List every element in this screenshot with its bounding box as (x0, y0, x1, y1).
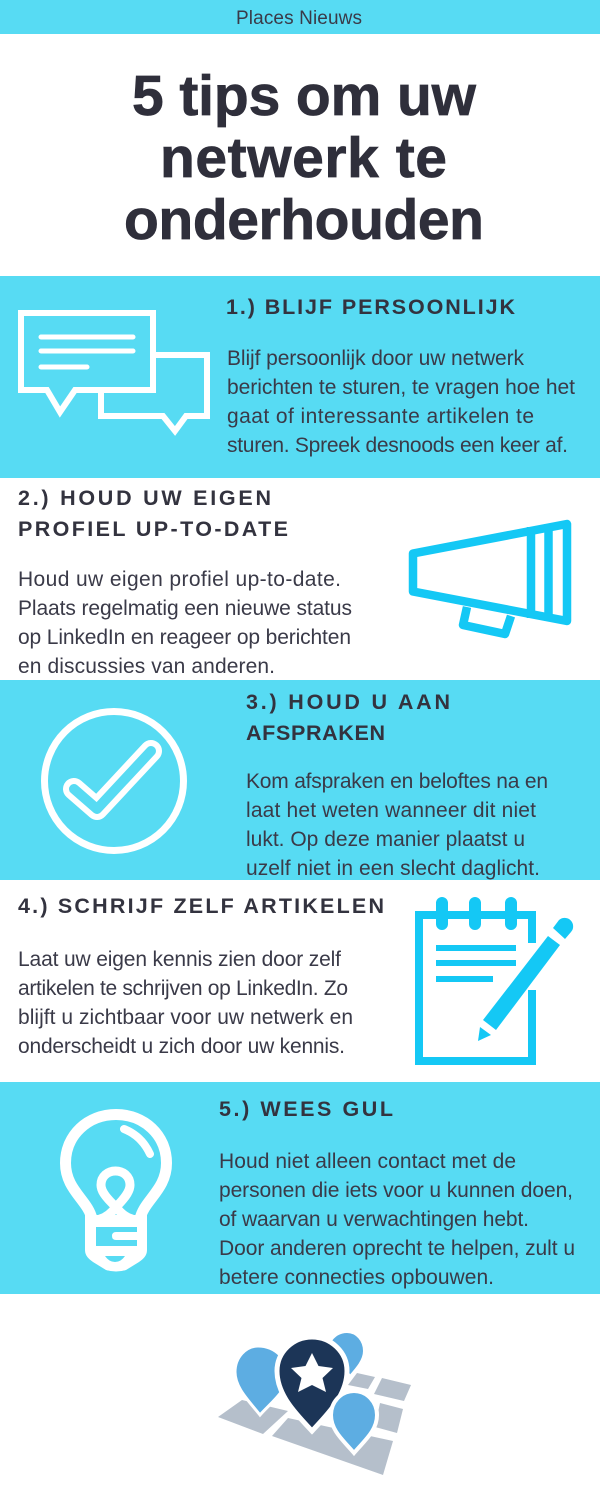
heading: tip 1: 1.) BLIJF PERSOONLIJK (226, 295, 515, 319)
text: tip 5: betere connecties opbouwen. (219, 1266, 494, 1289)
heading: tip 5: 5.) WEES GUL (219, 1097, 393, 1121)
text: tip 5 (219, 1150, 575, 1289)
text: tip 1: sturen. Spreek desnoods een keer af. (227, 434, 568, 457)
text: tip 2: op LinkedIn en reageer op berichten (18, 626, 351, 649)
text: tip 4: Laat uw eigen kennis zien door zelf (18, 948, 341, 971)
heading: tip 2: PROFIEL UP-TO-DATE (18, 517, 288, 541)
text: tip 3: lukt. Op deze manier plaatst u (246, 828, 525, 851)
text: tip 5: personen die iets voor u kunnen doen, (219, 1179, 573, 1202)
text: tip 5: Door anderen oprecht te helpen, zult u (219, 1237, 575, 1260)
text: tip 5: of waarvan u verwachtingen hebt. (219, 1208, 529, 1231)
text: tip 3: laat het weten wanneer dit niet (246, 799, 536, 822)
text: tip 1: berichten te sturen, te vragen hoe het (227, 376, 575, 399)
heading: tip 3 (246, 690, 450, 745)
panel: tip 5 (0, 1082, 600, 1294)
logo: map with pins (218, 1332, 411, 1475)
header band: Places Nieuws (236, 8, 362, 29)
text: tip 1 (227, 347, 575, 457)
heading: tip 2 (18, 486, 288, 541)
text: tip 1: Blijf persoonlijk door uw netwerk (227, 347, 524, 370)
text: tip 2: en discussies van anderen. (18, 655, 275, 678)
title: 5 tips om uw (132, 64, 477, 128)
heading: tip 4: 4.) SCHRIJF ZELF ARTIKELEN (18, 894, 384, 918)
panel: tip 1 (0, 276, 600, 478)
text: tip 4 (18, 948, 353, 1058)
icon: megaphone (413, 524, 567, 634)
map tiles (218, 1373, 411, 1475)
text: tip 3: Kom afspraken en beloftes na en (246, 770, 548, 793)
text: tip 2: Plaats regelmatig een nieuwe status (18, 597, 352, 620)
heading: tip 3: 3.) HOUD U AAN (246, 690, 450, 714)
panel: tip 4 (18, 894, 573, 1061)
text: tip 2: Houd uw eigen profiel up-to-date. (18, 568, 341, 591)
title: netwerk te (160, 126, 447, 190)
panel: tip 3 (0, 680, 600, 880)
text: tip 5: Houd niet alleen contact met de (219, 1150, 516, 1173)
icon: chat bubbles (21, 313, 207, 431)
dark pin with star (277, 1337, 347, 1431)
title: onderhouden (124, 188, 484, 252)
text: tip 4: artikelen te schrijven op LinkedIn. Zo (18, 977, 348, 1000)
text: tip 4: onderscheidt u zich door uw kennis. (18, 1035, 345, 1058)
light pin front (331, 1391, 377, 1453)
text: tip 2 (18, 568, 352, 678)
text: tip 3 (246, 770, 548, 880)
light pin left (235, 1346, 284, 1415)
header band (0, 0, 600, 34)
text: tip 3: uzelf niet in een slecht daglicht. (246, 857, 540, 880)
text: tip 1: gaat of interessante artikelen te (227, 405, 534, 428)
icon: notepad and pencil (419, 903, 573, 1061)
title (124, 64, 484, 252)
panel: tip 2 (18, 486, 567, 678)
light pin back (330, 1332, 364, 1376)
icon: check mark in circle (44, 712, 184, 850)
text: tip 4: blijft u zichtbaar voor uw netwerk en (18, 1006, 353, 1029)
heading: tip 2: 2.) HOUD UW EIGEN (18, 486, 271, 510)
icon: light bulb (66, 1114, 166, 1272)
heading: tip 3: AFSPRAKEN (246, 721, 385, 745)
